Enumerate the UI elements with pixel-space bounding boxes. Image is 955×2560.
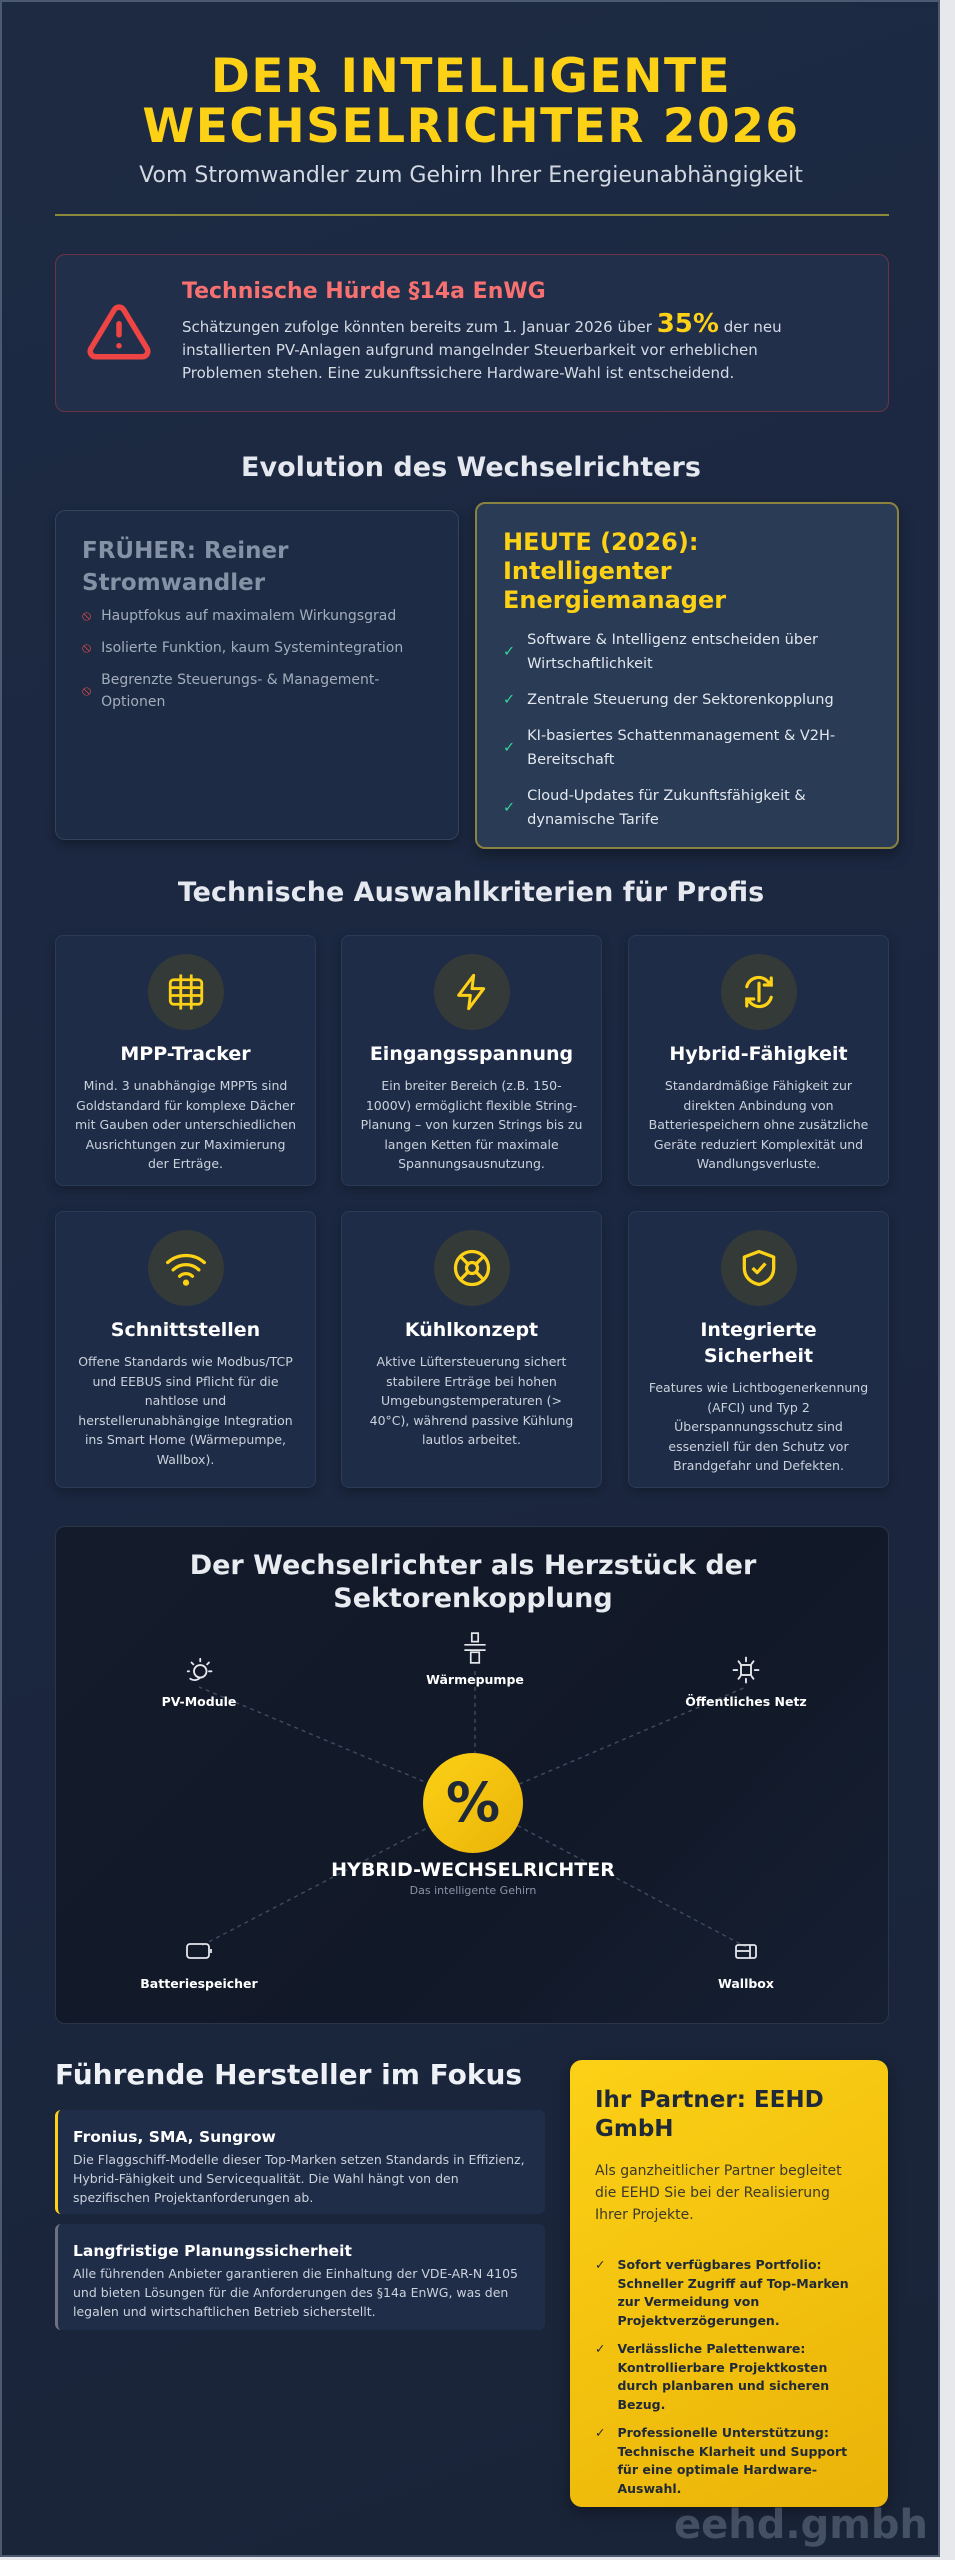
heading: auswahlkriterien: Technische Auswahlkriterien für Profis [178, 877, 764, 908]
card: Hybrid-Fähigkeit: Hybrid-Fähigkeit [669, 1043, 848, 1065]
panel: sektorenkopplung [55, 1526, 889, 2024]
panel: früher: FRÜHER: Reiner [82, 538, 288, 564]
center: hybrid-wechselrichter [331, 1753, 615, 1897]
card: Eingangsspannung: Eingangsspannung [370, 1043, 573, 1065]
card: Schnittstellen [55, 1211, 316, 1488]
panel: früher: Hauptfokus auf maximalem Wirkungsgrad [101, 608, 396, 624]
alert text: Schätzungen zufolge könnten bereits zum 1. Januar 2026 über 35% der neu installierten PV-Anlagen aufgrund mangelnder Steuerbarkeit vor erheblichen Problemen stehen. Eine zukunftssichere Hardware-Wahl ist entscheidend. [182, 309, 782, 382]
card: Hybrid-Fähigkeit: Standardmäßige Fähigkeit zur direkten Anbindung von Batteriespeichern ohne zusätzliche Geräte reduziert Komplexität und Wandlungsverluste. [649, 1078, 868, 1171]
panel: früher: ⦸ [82, 683, 91, 699]
node: Wärmepumpe [426, 1632, 524, 1687]
panel: heute: Zentrale Steuerung der Sektorenkopplung [527, 692, 834, 708]
panel: heute: Software & Intelligenz entscheiden über Wirtschaftlichkeit [527, 632, 818, 672]
node: Wallbox [718, 1944, 774, 1991]
panel: heute: Energiemanager [503, 586, 726, 614]
box: Planungssicherheit: Langfristige Planungssicherheit [73, 2242, 352, 2260]
card: Kühlkonzept: Aktive Lüftersteuerung sichert stabilere Erträge bei hohen Umgebungstemperaturen (> 40°C), während passive Kühlung lautlos arbeitet. [370, 1354, 573, 1447]
center: hybrid-wechselrichter: Das intelligente Gehirn [410, 1884, 536, 1897]
box: Fronius SMA Sungrow: Fronius, SMA, Sungrow [73, 2128, 276, 2146]
panel: heute: Intelligenter [503, 557, 672, 585]
alert heading: Technische Hürde §14a EnWG [182, 279, 546, 304]
center: hybrid-wechselrichter: % [446, 1771, 500, 1834]
panel: heute: ✓ [503, 644, 515, 660]
heading [190, 1550, 756, 1614]
card: MPP-Tracker: MPP-Tracker [120, 1043, 251, 1065]
heading: evolution: Evolution des Wechselrichters [241, 452, 701, 483]
node: PV-Module: PV-Module [162, 1694, 236, 1709]
panel: partner EEHD: Als ganzheitlicher Partner begleitet die EEHD Sie bei der Realisierung Ihrer Projekte. [595, 2163, 842, 2223]
watermark: eehd.gmbh [674, 2502, 928, 2548]
box: Planungssicherheit [55, 2224, 545, 2330]
node: Öffentliches Netz [685, 1656, 807, 1709]
node: Wärmepumpe: Wärmepumpe [426, 1672, 524, 1687]
node: Wallbox: Wallbox [718, 1976, 774, 1991]
heading: Sektorenkopplung [333, 1583, 613, 1614]
center: hybrid-wechselrichter: HYBRID-WECHSELRICHTER [331, 1859, 615, 1881]
box: Fronius SMA Sungrow [55, 2110, 545, 2214]
panel: früher: Begrenzte Steuerungs- & Management-Optionen [101, 672, 379, 710]
panel: heute: Cloud-Updates für Zukunftsfähigkeit & dynamische Tarife [527, 788, 806, 828]
card: Eingangsspannung [341, 935, 602, 1186]
node: Öffentliches Netz: Öffentliches Netz [685, 1694, 807, 1709]
subtitle: Vom Stromwandler zum Gehirn Ihrer Energieunabhängigkeit [139, 163, 803, 188]
connection lines [198, 1671, 746, 1948]
heading: hersteller: Führende Hersteller im Fokus [55, 2058, 522, 2091]
panel: heute: KI-basiertes Schattenmanagement & V2H-Bereitschaft [527, 728, 835, 768]
node: Batteriespeicher: Batteriespeicher [140, 1976, 258, 1991]
card: Integrierte Sicherheit: Integrierte [700, 1319, 817, 1341]
node: PV-Module [162, 1658, 236, 1709]
panel: früher [55, 510, 459, 840]
panel: partner EEHD: Ihr Partner: EEHD [595, 2087, 824, 2113]
panel: partner EEHD [570, 2060, 888, 2507]
node: Batteriespeicher [140, 1943, 258, 1991]
card: Schnittstellen: Schnittstellen [111, 1319, 260, 1341]
panel: partner EEHD: Sofort verfügbares Portfolio: Schneller Zugriff auf Top-Marken zur Vermeidung von Projektverzögerungen. [617, 2257, 849, 2328]
panel: früher: Isolierte Funktion, kaum Systemintegration [101, 640, 403, 656]
panel: partner EEHD: ✓ [595, 2425, 605, 2440]
panel: heute: HEUTE (2026): [503, 528, 698, 556]
panel: partner EEHD: Professionelle Unterstützung: Technische Klarheit und Support für eine optimale Hardware-Auswahl. [617, 2425, 847, 2496]
icon: warning triangle [87, 304, 151, 360]
panel: früher: Stromwandler [82, 570, 265, 596]
title [142, 49, 800, 154]
card: Hybrid-Fähigkeit [628, 935, 889, 1186]
card: Eingangsspannung: Ein breiter Bereich (z.B. 150-1000V) ermöglicht flexible String-Planung – von kurzen Strings bis zu langen Ketten für maximale Spannungsausnutzung. [361, 1078, 582, 1171]
panel: partner EEHD: ✓ [595, 2341, 605, 2356]
box: Planungssicherheit: Alle führenden Anbieter garantieren die Einhaltung der VDE-AR-N 4105 und bieten Lösungen für die Anforderungen des §14a EnWG, was den legalen und wirtschaftlichen Betrieb sicherstellt. [73, 2266, 518, 2319]
card: Integrierte Sicherheit [628, 1211, 889, 1488]
card: Integrierte Sicherheit: Sicherheit [704, 1345, 813, 1367]
alert panel: §14a EnWG [55, 254, 889, 412]
heading: Der Wechselrichter als Herzstück der [190, 1550, 756, 1581]
card: Kühlkonzept [341, 1211, 602, 1488]
panel: partner EEHD: Verlässliche Palettenware: Kontrollierbare Projektkosten durch planbaren und sicheren Bezug. [617, 2341, 829, 2412]
box: Fronius SMA Sungrow: Die Flaggschiff-Modelle dieser Top-Marken setzen Standards in Effizienz, Hybrid-Fähigkeit und Servicequalität. Die Wahl hängt von den spezifischen Projektanforderungen ab. [73, 2152, 525, 2205]
panel: früher: ⦸ [82, 640, 91, 656]
card: MPP-Tracker [55, 935, 316, 1186]
panel: heute: ✓ [503, 800, 515, 816]
title: WECHSELRICHTER 2026 [142, 99, 800, 154]
card: MPP-Tracker: Mind. 3 unabhängige MPPTs sind Goldstandard für komplexe Dächer mit Gauben oder unterschiedlichen Ausrichtungen zur Maximierung der Erträge. [75, 1078, 296, 1171]
card: Integrierte Sicherheit: Features wie Lichtbogenerkennung (AFCI) und Typ 2 Überspannungsschutz sind essenziell für den Schutz vor Brandgefahr und Defekten. [649, 1380, 868, 1473]
panel: heute: ✓ [503, 692, 515, 708]
card: Schnittstellen: Offene Standards wie Modbus/TCP und EEBUS sind Pflicht für die nahtlose und herstellerunabhängige Integration ins Smart Home (Wärmepumpe, Wallbox). [78, 1354, 293, 1466]
title: DER INTELLIGENTE [211, 49, 731, 104]
panel: partner EEHD: ✓ [595, 2257, 605, 2272]
panel: partner EEHD: GmbH [595, 2116, 674, 2142]
panel: heute: ✓ [503, 740, 515, 756]
card: Kühlkonzept: Kühlkonzept [405, 1319, 538, 1341]
panel: früher: ⦸ [82, 608, 91, 624]
panel: heute [475, 502, 899, 849]
